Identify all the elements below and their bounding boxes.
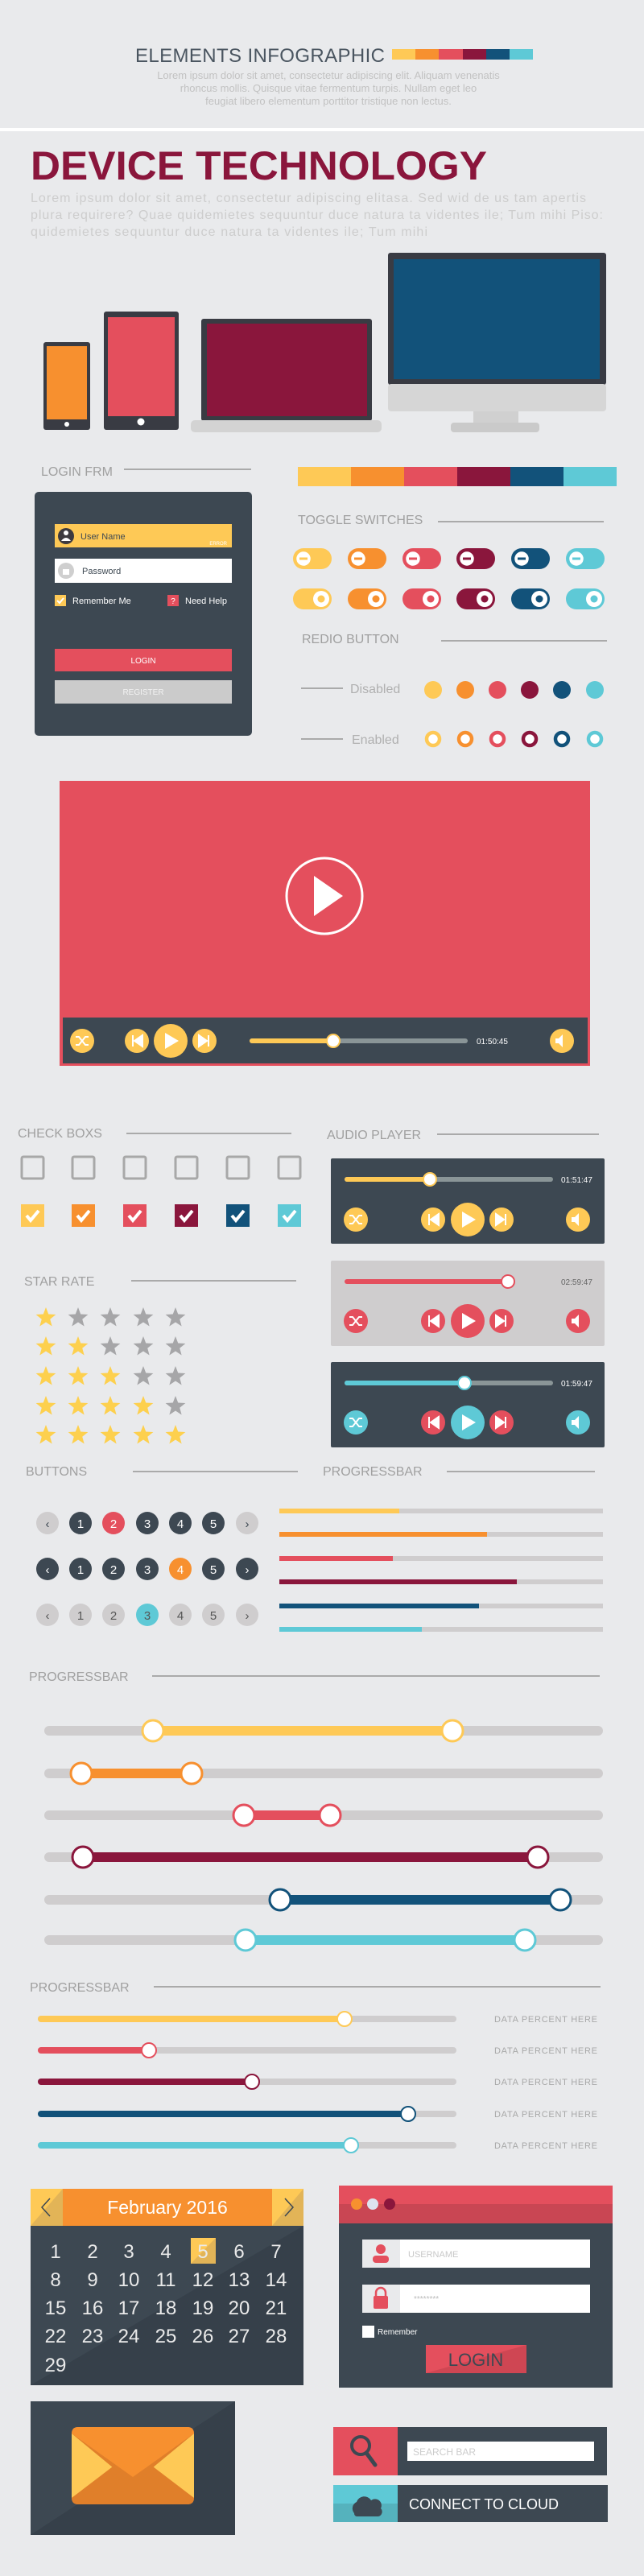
panel: login form: User Name: [80, 532, 126, 542]
calendar: 28: [266, 2326, 287, 2347]
progress bars simple: [279, 1509, 603, 1632]
pagination buttons: 5: [210, 1609, 217, 1623]
audio player 3: 01:59:47: [561, 1380, 592, 1389]
calendar: 14: [266, 2269, 287, 2291]
calendar: February 2016: [107, 2197, 228, 2218]
calendar: 25: [155, 2326, 176, 2347]
pagination buttons: 4: [177, 1563, 184, 1577]
calendar: 17: [118, 2297, 139, 2319]
audio player 2: [331, 1261, 605, 1346]
range sliders: [44, 1720, 603, 1951]
login window panel: Remember: [378, 2328, 418, 2337]
panel: login form: REGISTER: [122, 688, 164, 697]
calendar: 21: [266, 2297, 287, 2319]
calendar: 11: [156, 2269, 175, 2291]
heading: check boxes: CHECK BOXS: [18, 1127, 102, 1141]
header lorem text: rhoncus mollis. Quisque vitae fermentum turpis. Nullam eget leo: [180, 82, 477, 94]
monitor: [388, 253, 606, 432]
pagination buttons: 3: [144, 1609, 151, 1623]
color palette bar: [298, 467, 617, 486]
phone: [43, 342, 90, 430]
panel: login form: LOGIN: [130, 657, 156, 666]
calendar: 5: [197, 2241, 208, 2263]
pagination buttons: 3: [144, 1517, 151, 1531]
pagination buttons: 5: [210, 1563, 217, 1577]
audio player 2: 02:59:47: [561, 1278, 592, 1287]
toggle switches: [293, 548, 605, 609]
progress bars with labels: DATA PERCENT HERE: [494, 2015, 597, 2025]
heading: login form: LOGIN FRM: [41, 465, 113, 479]
heading: radio button: REDIO BUTTON: [302, 633, 399, 646]
main title: DEVICE TECHNOLOGY: [31, 143, 487, 188]
connect to cloud button: [333, 2485, 608, 2522]
pagination buttons: 2: [110, 1563, 117, 1577]
login window panel: ********: [414, 2295, 439, 2304]
pagination buttons: [36, 1512, 258, 1626]
calendar: 10: [118, 2269, 139, 2291]
panel: login form: [35, 492, 252, 736]
header title: [135, 45, 533, 67]
pagination buttons: 1: [77, 1517, 84, 1531]
checkboxes: [21, 1157, 301, 1227]
calendar: 8: [50, 2269, 61, 2291]
intro paragraph: Lorem ipsum dolor sit amet, consectetur adipiscing elitasa. Sed wid de us tam apertis: [31, 192, 586, 205]
tablet: [104, 312, 179, 430]
calendar: 23: [82, 2326, 103, 2347]
heading: audio player: AUDIO PLAYER: [327, 1129, 421, 1142]
intro paragraph: [31, 192, 603, 239]
calendar: 6: [233, 2241, 245, 2263]
heading: progressbar 1: PROGRESSBAR: [323, 1465, 423, 1479]
progress bars with labels: DATA PERCENT HERE: [494, 2110, 597, 2120]
intro paragraph: plura requirere? Quae quidemietes sequuntur duce natura ta videntes ile; Tum mihi Piso:: [31, 208, 603, 222]
mail icon panel: [31, 2401, 235, 2535]
panel: login form: Need Help: [185, 597, 227, 606]
calendar: 20: [229, 2297, 250, 2319]
icon: envelope: [72, 2427, 194, 2504]
calendar: 2: [87, 2241, 98, 2263]
pagination buttons: 2: [110, 1609, 117, 1623]
audio player 3: [331, 1362, 605, 1447]
search bar: SEARCH BAR: [413, 2446, 476, 2458]
pagination buttons: ‹: [45, 1517, 50, 1531]
header lorem text: [157, 69, 500, 107]
calendar: 3: [123, 2241, 134, 2263]
audio player 1: [331, 1158, 605, 1244]
calendar: 16: [82, 2297, 103, 2319]
calendar: 19: [192, 2297, 213, 2319]
calendar: [31, 2189, 303, 2385]
heading: star rate: STAR RATE: [24, 1275, 94, 1289]
pagination buttons: ›: [245, 1609, 250, 1623]
calendar: 13: [229, 2269, 250, 2291]
intro paragraph: quidemietes sequuntur duce natura ta videntes ile; Tum mihi: [31, 225, 427, 239]
progress bars with labels: DATA PERCENT HERE: [494, 2046, 597, 2056]
calendar: 1: [50, 2241, 61, 2263]
pagination buttons: 1: [77, 1563, 84, 1577]
heading: progressbar 2: PROGRESSBAR: [29, 1670, 129, 1684]
header lorem text: Lorem ipsum dolor sit amet, consectetur adipiscing elit. Aliquam venenatis: [157, 69, 500, 81]
calendar: 24: [118, 2326, 139, 2347]
video player: [60, 781, 590, 1066]
pagination buttons: 4: [177, 1517, 184, 1531]
calendar: 12: [192, 2269, 213, 2291]
pagination buttons: 1: [77, 1609, 84, 1623]
star ratings: [36, 1307, 185, 1444]
calendar: 7: [270, 2241, 282, 2263]
login window panel: [339, 2186, 613, 2388]
calendar: 26: [192, 2326, 213, 2347]
icon: big play: [287, 858, 362, 934]
heading: toggle switches: TOGGLE SWITCHES: [298, 514, 423, 527]
calendar: 9: [87, 2269, 98, 2291]
panel: login form: ?: [171, 597, 175, 606]
calendar: 18: [155, 2297, 176, 2319]
calendar: 15: [45, 2297, 66, 2319]
header title: ELEMENTS INFOGRAPHIC: [135, 45, 385, 67]
progress bars with labels: DATA PERCENT HERE: [494, 2078, 597, 2087]
video controls: [63, 1018, 588, 1063]
panel: login form: Remember Me: [72, 597, 131, 606]
radio buttons: [301, 681, 604, 747]
header lorem text: feugiat libero elementum porttitor tristique non lectus.: [205, 95, 452, 107]
audio player 1: 01:51:47: [561, 1176, 592, 1185]
calendar: 27: [229, 2326, 250, 2347]
panel: login form: Password: [82, 567, 121, 576]
pagination buttons: 3: [144, 1563, 151, 1577]
radio buttons: Disabled: [350, 683, 400, 696]
devices illustration: [43, 253, 606, 432]
connect to cloud button: CONNECT TO CLOUD: [409, 2496, 559, 2512]
calendar: 4: [160, 2241, 171, 2263]
pagination buttons: ‹: [45, 1563, 50, 1577]
heading: progressbar 3: PROGRESSBAR: [30, 1981, 130, 1995]
pagination buttons: 2: [110, 1517, 117, 1531]
login window panel: USERNAME: [408, 2250, 458, 2260]
pagination buttons: 4: [177, 1609, 184, 1623]
radio buttons: Enabled: [352, 733, 399, 747]
video controls: 01:50:45: [477, 1038, 508, 1046]
search bar: [333, 2427, 607, 2475]
progress bars with labels: [38, 2012, 597, 2153]
pagination buttons: ›: [245, 1517, 250, 1531]
calendar: 22: [45, 2326, 66, 2347]
login window panel: LOGIN: [448, 2350, 503, 2370]
pagination buttons: ‹: [45, 1609, 50, 1623]
heading: buttons: BUTTONS: [26, 1465, 87, 1479]
panel: login form: ERROR: [209, 542, 228, 547]
pagination buttons: ›: [245, 1563, 250, 1577]
progress bars with labels: DATA PERCENT HERE: [494, 2141, 597, 2151]
pagination buttons: 5: [210, 1517, 217, 1531]
calendar: 29: [45, 2355, 66, 2376]
laptop: [191, 319, 382, 432]
